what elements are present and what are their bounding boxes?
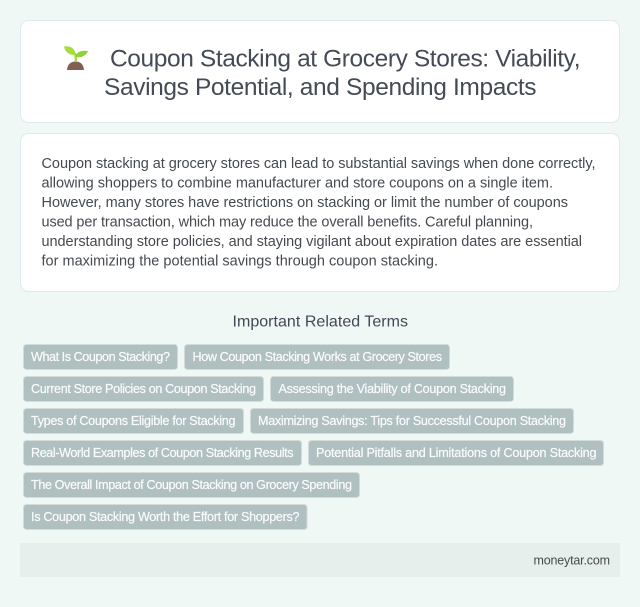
text block: description paragraph: understanding store policies, and staying vigilant about expiration dates are essential (42, 234, 582, 250)
tag (24, 344, 178, 370)
panel: title card (20, 20, 620, 122)
title: Coupon Stacking at Grocery Stores: Viability, (110, 46, 580, 72)
text block: description paragraph: allowing shoppers to combine manufacturer and store coupons on a single item. (42, 176, 553, 192)
tag: Assessing the Viability of Coupon Stacking (278, 382, 506, 396)
panel: related term tags (24, 344, 604, 530)
tag (308, 440, 604, 466)
tag (270, 376, 514, 402)
text block: description paragraph: However, many stores have restrictions on stacking or limit the number of coupons (42, 195, 568, 211)
footer bar (20, 543, 620, 577)
tag (184, 344, 450, 370)
tag (24, 504, 307, 530)
tag: Potential Pitfalls and Limitations of Coupon Stacking (316, 446, 596, 460)
text block: description paragraph: for maximizing the potential savings through coupon stacking. (42, 254, 438, 270)
tag: Types of Coupons Eligible for Stacking (31, 414, 236, 428)
footer text: source: moneytar.com (534, 553, 610, 567)
tag: The Overall Impact of Coupon Stacking on Grocery Spending (31, 478, 352, 492)
tag (24, 376, 264, 402)
tag (250, 408, 574, 434)
tag: How Coupon Stacking Works at Grocery Stores (192, 350, 442, 364)
tag: Real-World Examples of Coupon Stacking Results (31, 446, 294, 460)
text block: description paragraph (42, 156, 596, 270)
tag (24, 440, 302, 466)
icon: sprout (64, 46, 88, 70)
tag (24, 408, 244, 434)
heading: related terms: Important Related Terms (232, 314, 408, 330)
text block: description paragraph: used per transaction, which may reduce the overall benefits. Careful planning, (42, 214, 533, 230)
title (104, 46, 580, 101)
tag: Is Coupon Stacking Worth the Effort for Shoppers? (31, 510, 300, 524)
panel: description (20, 134, 620, 292)
text block: description paragraph: Coupon stacking at grocery stores can lead to substantial savings when done correctly, (42, 156, 596, 172)
tag: Maximizing Savings: Tips for Successful Coupon Stacking (258, 414, 566, 428)
tag: Current Store Policies on Coupon Stacking (31, 382, 256, 396)
tag (24, 472, 360, 498)
tag: What Is Coupon Stacking? (31, 350, 170, 364)
title: Savings Potential, and Spending Impacts (104, 74, 536, 101)
